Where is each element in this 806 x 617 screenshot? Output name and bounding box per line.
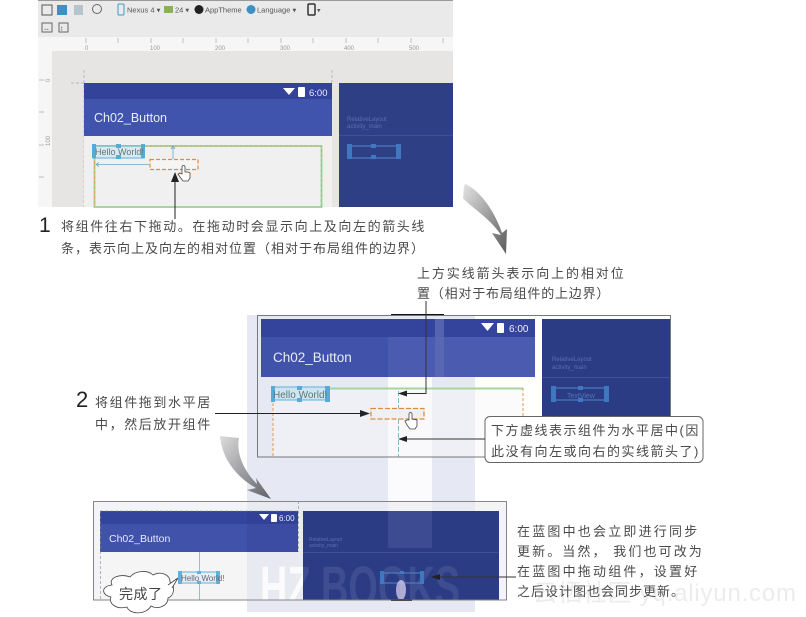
phone preview [261, 319, 535, 457]
phone preview: 6:00 [279, 514, 295, 523]
rulers: 200 [215, 46, 226, 52]
blueprint preview: activity_main [552, 365, 587, 371]
background watermark [247, 315, 475, 612]
blueprint preview: RelativeLayout [552, 357, 592, 363]
callout: lower dashed line: 下方虚线表示组件为水平居中(因 [491, 423, 700, 438]
phone preview: Hello World! [95, 147, 144, 157]
blueprint preview [303, 511, 499, 600]
note: blueprint sync: 更新。当然， 我们也可改为 [517, 544, 704, 559]
screenshot 2: drag to center [258, 314, 670, 457]
rulers: 100 [46, 135, 52, 146]
rulers: 500 [409, 46, 420, 52]
toolbar: Language ▾ [257, 6, 296, 14]
callout cloud: done [104, 571, 178, 613]
arrow: curved from step 1 to step 2 [463, 184, 507, 254]
toolbar: 24 ▾ [175, 6, 189, 14]
note: blueprint sync: 在蓝图中也会立即进行同步 [517, 524, 699, 539]
toolbar: AppTheme [205, 6, 242, 14]
toolbar: Nexus 4 ▾ [127, 6, 161, 14]
rulers: 300 [280, 46, 291, 52]
toolbar: ▾ [317, 8, 321, 14]
toolbar: ↔ [43, 26, 50, 32]
step 1 text [61, 219, 426, 256]
step 2 text: 中，然后放开组件 [95, 417, 212, 432]
note: upper solid arrow: 上方实线箭头表示向上的相对位 [417, 266, 626, 281]
blueprint preview: TextView [567, 393, 596, 400]
HZ BOOKS watermark overlay [262, 566, 458, 600]
callout: lower dashed line [485, 416, 703, 462]
phone preview: Hello World! [181, 574, 224, 583]
phone preview: 6:00 [509, 324, 529, 335]
blueprint preview: activity_main [309, 543, 338, 549]
step 1 number: 1 [39, 214, 51, 237]
step 1 text: 条，表示向上及向左的相对位置（相对于布局组件的边界） [61, 241, 425, 256]
phone preview [100, 501, 298, 600]
phone preview: Ch02_Button [94, 111, 167, 125]
arrow: curved from step 2 to step 3 [220, 436, 271, 499]
note: upper solid arrow [417, 266, 626, 301]
rulers: 100 [150, 46, 161, 52]
phone preview [84, 83, 332, 207]
blueprint preview: activity_main [347, 124, 382, 130]
step 1 text: 将组件往右下拖动。在拖动时会显示向上及向左的箭头线 [61, 219, 426, 234]
toolbar: ↕ [60, 26, 64, 32]
phone preview: Hello World! [273, 390, 327, 401]
step 2 text: 将组件拖到水平居 [95, 395, 212, 410]
phone preview: Ch02_Button [273, 350, 352, 365]
note: blueprint sync: 在蓝图中拖动组件，设置好 [517, 564, 699, 579]
note: blueprint sync [517, 524, 704, 599]
arrow: callout to dashed line [398, 436, 485, 442]
blueprint preview: RelativeLayout [309, 537, 343, 543]
callout: lower dashed line: 此没有向左或向右的实线箭头了) [491, 444, 700, 459]
rulers: 400 [344, 46, 355, 52]
blueprint preview [542, 319, 670, 457]
arrow: note to upper solid line [398, 301, 426, 396]
screenshot 3: final result [93, 501, 507, 601]
phone preview: Ch02_Button [109, 533, 170, 545]
note: blueprint sync: 之后设计图也会同步更新。 [517, 584, 685, 599]
note: upper solid arrow: 置（相对于布局组件的上边界） [417, 286, 610, 301]
callout cloud: done: 完成了 [119, 586, 162, 602]
toolbar [38, 0, 453, 37]
rulers: 0 [85, 46, 89, 52]
arrow: step 1 callout pointer [171, 172, 179, 219]
phone preview: 6:00 [309, 88, 328, 99]
arrow: right note to blueprint [431, 574, 516, 580]
step 2 number: 2 [76, 387, 88, 412]
arrow: step 2 to dashed box [215, 410, 370, 417]
blueprint preview [339, 83, 453, 207]
blueprint preview: RelativeLayout [347, 117, 387, 123]
step 2 text [95, 395, 212, 432]
rulers: 0 [46, 78, 52, 82]
screenshot 1: Android Studio editor [38, 0, 453, 207]
rulers [38, 37, 453, 207]
blueprint component [380, 571, 424, 601]
source watermark: 云栖社区 yq.aliyun.com [533, 580, 797, 607]
